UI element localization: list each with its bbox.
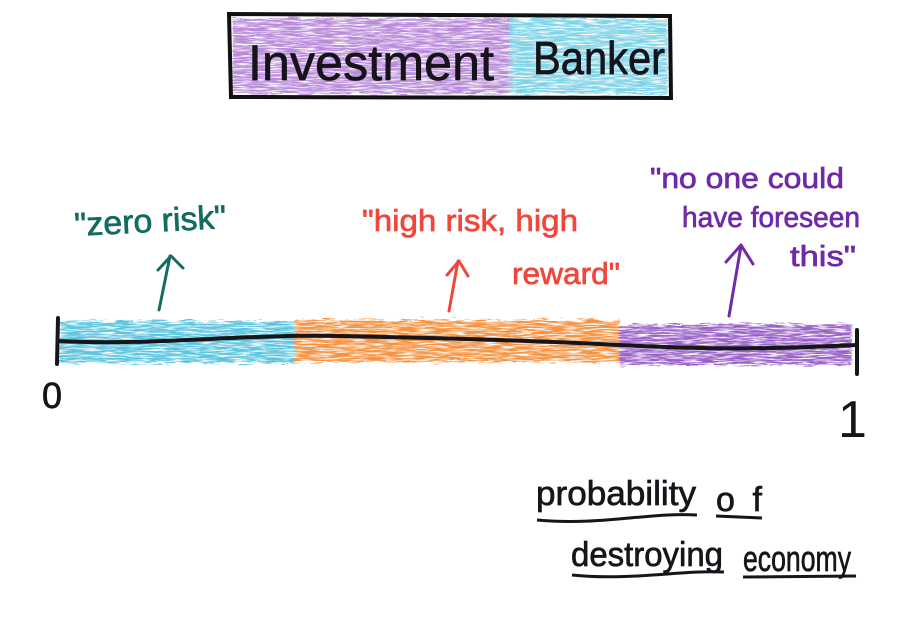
label: high risk, high reward: "high risk, high <box>362 203 578 238</box>
label: 1: 1 <box>838 391 867 449</box>
label: no one could have foreseen this: this" <box>790 241 856 273</box>
title box: Banker <box>533 32 665 84</box>
label: zero risk: "zero risk" <box>73 198 227 243</box>
axis line <box>57 318 857 374</box>
band: high risk segment <box>295 320 620 362</box>
title text: Investment <box>248 35 494 91</box>
probability scale <box>42 318 867 449</box>
arrow: no one could have foreseen <box>726 245 753 316</box>
title box <box>229 14 671 98</box>
label: high risk, high reward: reward" <box>512 256 620 291</box>
label: 0: 0 <box>42 375 62 416</box>
label: high risk, high reward <box>362 203 620 291</box>
arrow: zero risk <box>158 256 183 310</box>
axis caption: of <box>716 481 763 519</box>
label: no one could have foreseen this <box>650 163 860 273</box>
label: no one could have foreseen this: have foreseen <box>682 202 860 234</box>
band: zero risk segment <box>60 321 295 363</box>
axis caption <box>536 475 856 579</box>
axis caption: probability <box>536 475 696 513</box>
axis caption: economy <box>743 538 851 579</box>
label: no one could have foreseen this: "no one could <box>650 163 844 195</box>
band: foreseen segment <box>620 324 852 365</box>
axis caption: destroying <box>571 536 723 574</box>
arrow: high risk <box>447 261 468 311</box>
